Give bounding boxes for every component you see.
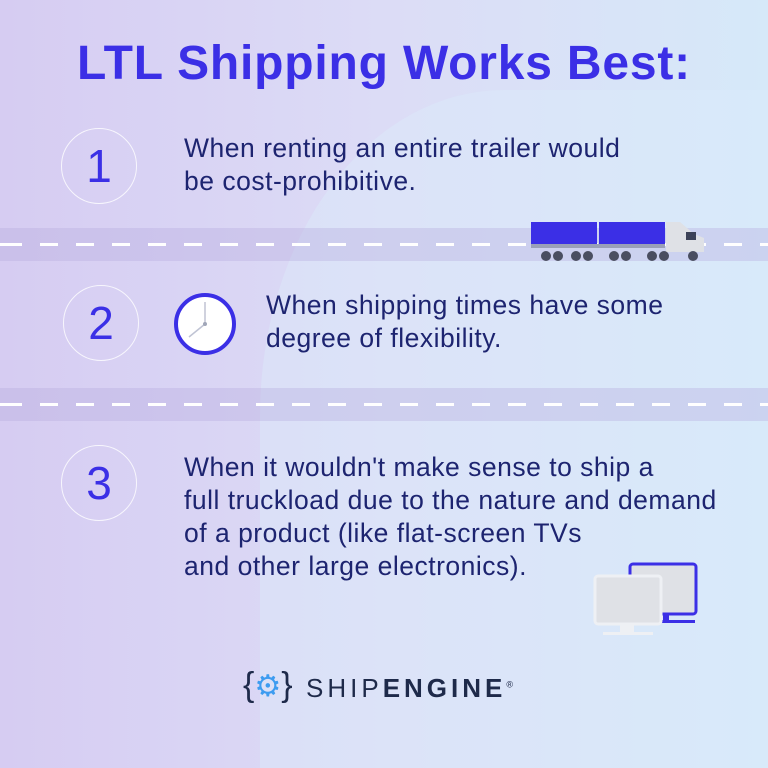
number 1 <box>61 128 137 204</box>
text 1: be cost-prohibitive. <box>184 166 416 196</box>
icon: clock <box>174 293 236 355</box>
text 2: degree of flexibility. <box>266 323 502 353</box>
icon: monitors <box>594 562 698 635</box>
title: LTL Shipping Works Best: <box>77 37 691 90</box>
text 2 <box>266 290 663 353</box>
text 3 <box>184 452 717 581</box>
number 2: 2 <box>88 297 114 349</box>
text 3: full truckload due to the nature and demand <box>184 485 717 515</box>
text 1: When renting an entire trailer would <box>184 133 620 163</box>
icon: gear braces: {⚙} <box>243 666 293 704</box>
number 3: 3 <box>86 457 112 509</box>
item 1 <box>61 128 620 204</box>
text 2: When shipping times have some <box>266 290 663 320</box>
road divider 2 <box>0 388 768 421</box>
number 1: 1 <box>86 140 112 192</box>
number 3 <box>61 445 137 521</box>
item 3 <box>61 445 717 581</box>
wordmark: SHIPENGINE® <box>306 673 517 703</box>
item 2 <box>63 285 663 361</box>
text 3: When it wouldn't make sense to ship a <box>184 452 654 482</box>
text 1 <box>184 133 620 196</box>
icon: truck <box>531 222 704 261</box>
road divider 1 <box>0 228 768 261</box>
text 3: and other large electronics). <box>184 551 527 581</box>
text 3: of a product (like flat-screen TVs <box>184 518 582 548</box>
number 2 <box>63 285 139 361</box>
logo <box>243 666 517 704</box>
